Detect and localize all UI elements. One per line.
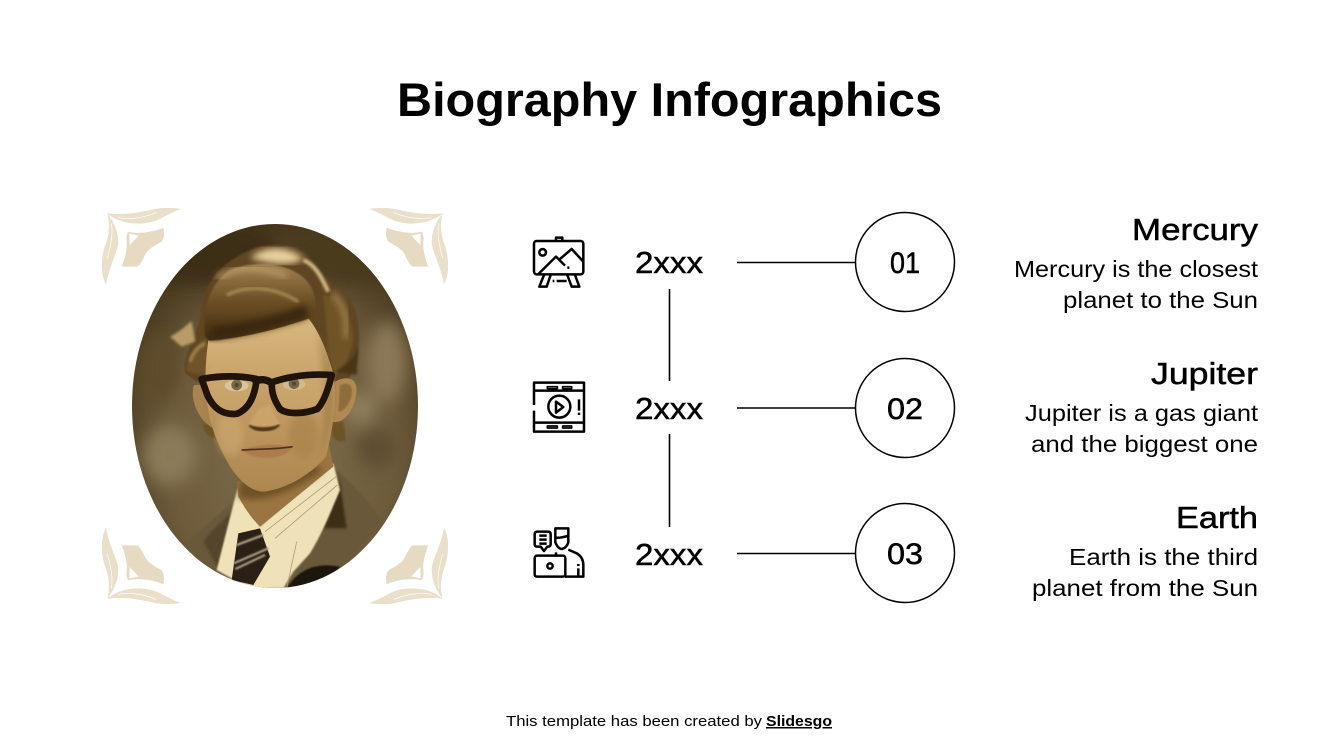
portrait with ornaments [102,208,448,604]
icon: easel [534,238,583,287]
text block: Earth: Earth [1176,500,1258,535]
footer credit: Slidesgo [766,713,832,730]
number circle 03: 03 [887,538,923,571]
ornament: bottom left [102,528,181,604]
text block: Mercury: Mercury [1132,212,1259,247]
hair back [185,244,359,382]
number circle 02 [856,358,954,458]
icon: person with laptop and speech bubble [535,528,583,577]
ears [331,378,357,422]
year labels [635,245,704,572]
title: Biography Infographics [397,73,942,126]
year 2: 2xxx [635,391,704,426]
year 3: 2xxx [635,537,704,572]
necktie [232,528,270,585]
text block: Jupiter: Jupiter is a gas giant [1025,400,1259,426]
number circle 01: 01 [890,247,920,280]
icon: film strip with play [534,383,584,432]
text block: Jupiter: Jupiter [1151,356,1258,391]
number circle 01 [856,212,954,312]
neck [237,442,333,527]
number circle 02: 02 [887,393,923,426]
jacket [183,472,358,587]
slide canvas [102,82,1258,729]
ornament: bottom right [369,528,448,604]
text block: Earth [1032,500,1258,601]
text block: Mercury: Mercury is the closest [1014,256,1259,282]
text block: Mercury [1014,212,1259,313]
text block: Earth: Earth is the third [1069,544,1258,570]
text block: Earth: planet from the Sun [1032,575,1258,601]
face [205,318,335,492]
hair lower tufts [203,422,346,441]
text block: Jupiter: and the biggest one [1031,431,1258,457]
nose shadow [249,405,279,431]
hair top sweep [205,264,316,341]
eyes [225,378,305,391]
glasses [202,375,332,414]
oval photo [120,218,427,595]
footer credit: This template has been created by [506,713,763,730]
mouth [242,445,293,458]
timeline connectors [670,262,856,554]
text block: Jupiter [1025,356,1259,457]
year 1: 2xxx [635,245,704,280]
number circle 03 [856,504,954,602]
ornament: top right [369,208,448,284]
text block: Mercury: planet to the Sun [1063,287,1258,313]
shirt collar [217,463,340,588]
ornament: top left [102,208,181,284]
